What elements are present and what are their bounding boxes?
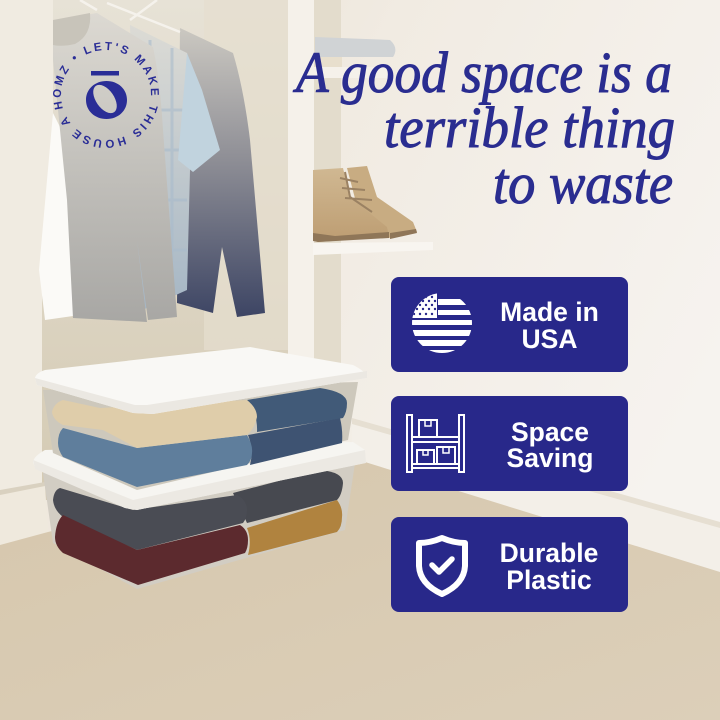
title: to waste [493,151,673,216]
label: USA [522,324,577,354]
wooden shelf [313,242,433,255]
label: Durable [500,538,598,568]
title: terrible thing [384,95,675,160]
icon: storage rack with boxes [407,415,464,472]
baseboard right [352,420,720,572]
storage bin: bottom [33,442,366,589]
lid [33,442,365,510]
lid [35,347,367,414]
baseboard left [0,485,48,545]
badge: Made in USA [391,277,628,372]
carpet floor [0,458,720,720]
blue sleeve [178,53,220,172]
badge: Space Saving [391,396,628,491]
label: Saving [507,443,593,473]
icon: US flag circle [412,293,474,353]
storage bin: top [35,347,367,490]
grey sweater [53,13,177,322]
badge: Durable Plastic [391,517,628,612]
logo badge: circular slogan: • LET'S MAKE THIS HOUSE A HOMZ [53,42,159,148]
white shirt [39,113,80,320]
folded blankets [233,470,343,523]
hangers [80,0,180,32]
icon: shield with check [419,538,465,594]
back boot [347,166,417,238]
label: Made in [500,297,599,327]
folded blankets [248,418,342,465]
shelf items: folded cloth, boots, shelves [313,37,433,255]
front boot [313,168,389,242]
plaid shirt [130,25,190,312]
title: A good space is a [292,40,672,105]
navy sweater [177,28,265,317]
label: Plastic [506,565,592,595]
clothes on hangers [39,0,265,322]
title [292,40,675,216]
label: Space [511,417,589,447]
